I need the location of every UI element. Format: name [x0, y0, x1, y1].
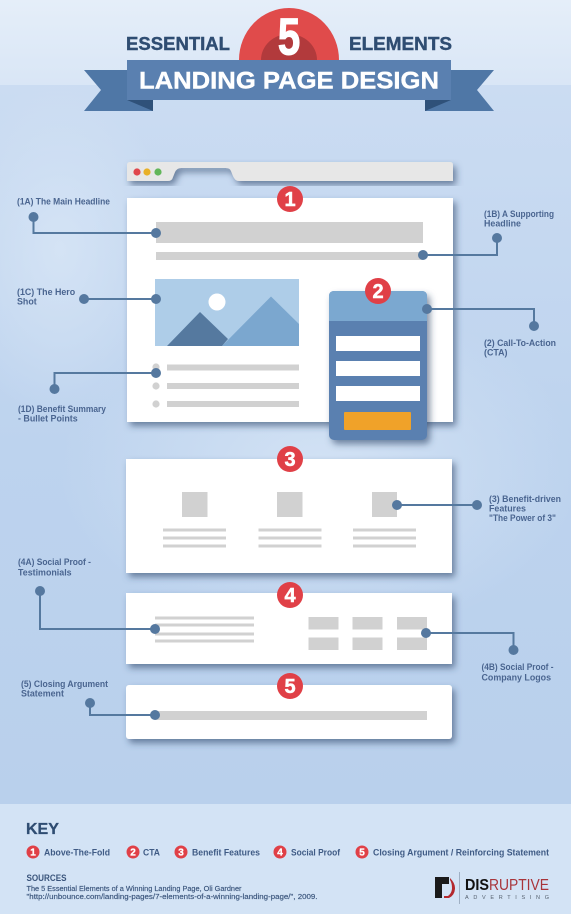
- key legend: Benefit Features: [192, 848, 260, 858]
- callout 2: [422, 304, 556, 358]
- callout 1C: [17, 287, 161, 306]
- key legend: 1: [30, 848, 36, 858]
- callout 4A: [18, 557, 160, 634]
- red semicircle with number 5: 5: [278, 8, 300, 66]
- key legend: Above-The-Fold: [44, 848, 110, 858]
- callout 1B: (1B) A Supporting: [484, 209, 554, 219]
- callout 1A: (1A) The Main Headline: [17, 196, 110, 206]
- panel 1: above the fold: [127, 186, 453, 422]
- callout 4B: [421, 628, 554, 682]
- key legend: 3: [178, 848, 184, 858]
- hero image: [155, 279, 299, 346]
- callout 3: (3) Benefit-driven: [489, 494, 561, 504]
- logo: disruptive advertising: ADVERTISING: [465, 895, 549, 901]
- callout 1B: Headline: [484, 218, 521, 228]
- callout 4A: (4A) Social Proof -: [18, 557, 91, 567]
- callout 3: "The Power of 3": [489, 513, 556, 523]
- key heading: KEY: [26, 821, 59, 838]
- header: [84, 8, 494, 111]
- sources: "http://unbounce.com/landing-pages/7-elements-of-a-winning-landing-page/", 2009.: [26, 894, 318, 901]
- badge 4: 4: [284, 585, 296, 607]
- key legend: 4: [277, 848, 283, 858]
- logo: disruptive advertising: DIS: [465, 877, 489, 894]
- sources: [26, 873, 318, 901]
- badge 5: [277, 673, 303, 699]
- callout 3: Features: [489, 504, 526, 514]
- heading: essential: ESSENTIAL: [126, 33, 230, 54]
- callout 4B: (4B) Social Proof -: [482, 662, 554, 672]
- badge 2: [365, 278, 391, 304]
- panel 4: social proof: [126, 582, 452, 664]
- callout 5: (5) Closing Argument: [21, 679, 108, 689]
- callout 1D: (1D) Benefit Summary: [18, 404, 106, 414]
- badge 2: 2: [372, 281, 384, 303]
- footer panel: [0, 804, 571, 914]
- browser bar: [127, 162, 453, 181]
- callout 5: [21, 679, 160, 720]
- key legend: Closing Argument / Reinforcing Statement: [373, 848, 549, 858]
- bullet points: [152, 363, 299, 408]
- callout 4B: Company Logos: [482, 672, 551, 682]
- badge 3: [277, 446, 303, 472]
- logo: disruptive advertising: RUPTIVE: [489, 877, 549, 894]
- key legend: Social Proof: [291, 848, 341, 858]
- callout 1C: (1C) The Hero: [17, 287, 76, 297]
- sources: The 5 Essential Elements of a Winning Landing Page, Oli Gardner: [26, 886, 242, 893]
- heading: elements: ELEMENTS: [349, 33, 452, 54]
- panel 3: benefit features: [126, 446, 452, 573]
- ribbon: [84, 60, 494, 111]
- badge 4: [277, 582, 303, 608]
- panel 2: call to action card: [329, 278, 427, 440]
- badge 1: 1: [284, 189, 296, 211]
- callout 1D: [18, 368, 161, 424]
- callout 2: (CTA): [484, 348, 508, 358]
- callout 1C: Shot: [17, 296, 37, 306]
- badge 5: 5: [284, 676, 296, 698]
- sources: SOURCES: [26, 873, 67, 883]
- red semicircle with number 5: [239, 8, 339, 66]
- key legend: CTA: [143, 848, 160, 858]
- callout 1A: [17, 196, 161, 238]
- callout 5: Statement: [21, 688, 64, 698]
- logo: disruptive advertising: [435, 872, 549, 904]
- callout 1B: [418, 209, 554, 260]
- key legend: [26, 846, 549, 858]
- supporting headline bar: [156, 252, 423, 260]
- submit button: [344, 412, 411, 430]
- key legend: 5: [359, 848, 365, 858]
- callout 3: [392, 494, 561, 523]
- heading: landing page design: LANDING PAGE DESIGN: [139, 68, 439, 94]
- callout 1D: - Bullet Points: [18, 414, 78, 424]
- callout 4A: Testimonials: [18, 568, 72, 578]
- badge 1: [277, 186, 303, 212]
- badge 3: 3: [284, 449, 296, 471]
- panel 5: closing argument: [126, 673, 452, 739]
- key legend: 2: [130, 848, 136, 858]
- main headline bar: [156, 222, 423, 243]
- callout 2: (2) Call-To-Action: [484, 338, 556, 348]
